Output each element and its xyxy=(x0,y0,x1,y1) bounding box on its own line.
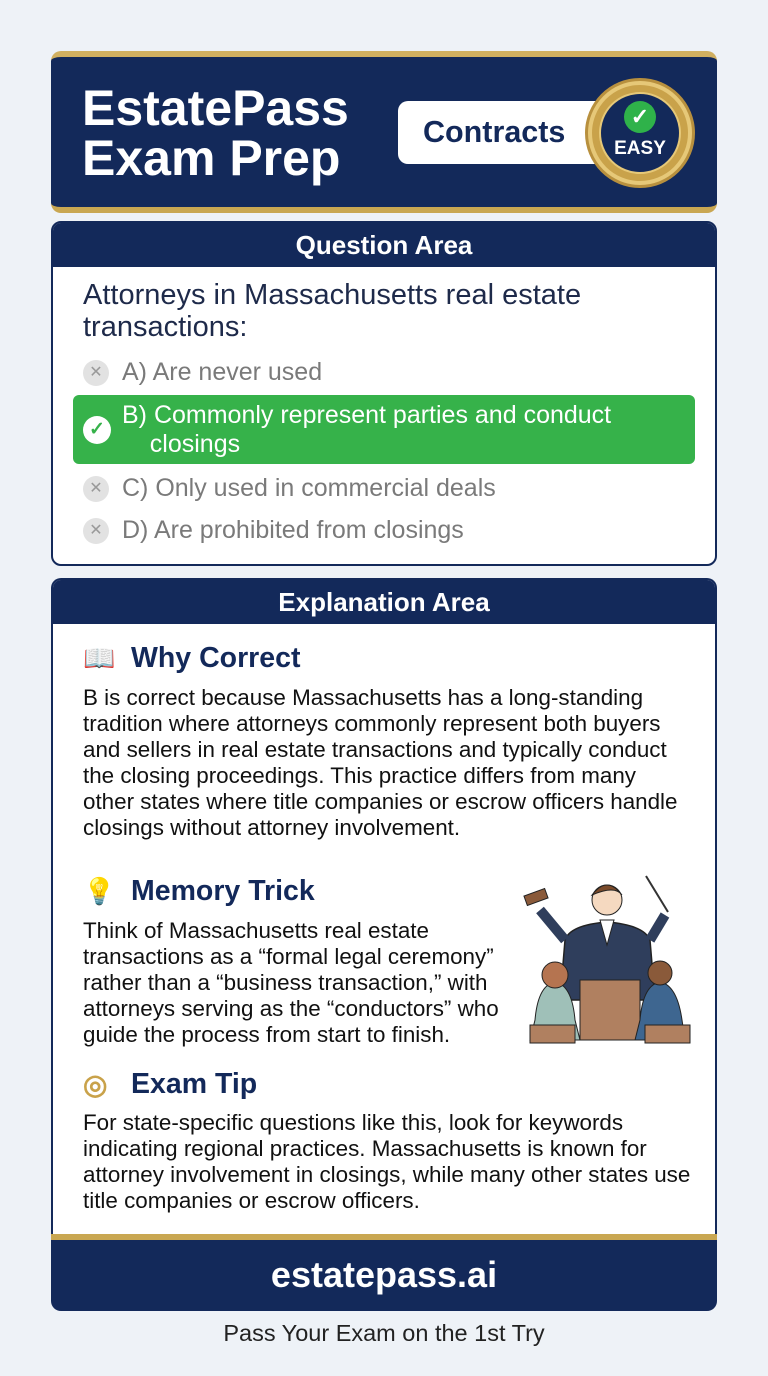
badge: easy: EASY xyxy=(614,138,666,159)
option D: D) Are prohibited from closings xyxy=(122,516,464,544)
badge: easy: ✓ xyxy=(631,104,649,129)
exam tip text xyxy=(83,1110,690,1213)
exam tip heading: Exam Tip xyxy=(131,1068,257,1100)
option B correct: B) Commonly represent parties and conduct xyxy=(122,401,611,429)
exam tip text: indicating regional practices. Massachusetts is known for xyxy=(83,1136,647,1161)
option D: ✕ xyxy=(89,522,103,538)
memory trick text: guide the process from start to finish. xyxy=(83,1022,450,1047)
title: Exam Prep xyxy=(82,130,340,186)
exam tip text: For state-specific questions like this, look for keywords xyxy=(83,1110,623,1135)
heading xyxy=(53,223,715,267)
heading xyxy=(53,580,715,624)
why correct heading: 📖 xyxy=(83,643,115,673)
exam tip text: title companies or escrow officers. xyxy=(83,1188,420,1213)
option C: ✕ xyxy=(89,480,103,496)
why correct text: closings without attorney involvement. xyxy=(83,815,460,840)
why correct text: B is correct because Massachusetts has a long-standing xyxy=(83,685,643,710)
memory trick text: rather than a “business transaction,” with xyxy=(83,970,487,995)
heading: Explanation Area xyxy=(278,587,490,617)
why correct text: other states where title companies or escrow officers handle xyxy=(83,789,677,814)
topic pill xyxy=(398,101,618,164)
why correct heading: Why Correct xyxy=(131,642,300,674)
footer bar: estatepass.ai xyxy=(271,1254,497,1295)
topic pill: Contracts xyxy=(423,115,565,149)
question text: transactions: xyxy=(83,311,247,343)
memory trick text: attorneys serving as the “conductors” who xyxy=(83,996,499,1021)
badge: easy xyxy=(588,81,692,185)
option C: C) Only used in commercial deals xyxy=(122,474,496,502)
why correct text: and sellers in real estate transactions and typically conduct xyxy=(83,737,667,762)
exam tip text: attorney involvement in closings, while many other states use xyxy=(83,1162,690,1187)
memory trick text: transactions as a “formal legal ceremony” xyxy=(83,944,494,969)
why correct text: the closing proceedings. This practice differs from many xyxy=(83,763,636,788)
heading: Question Area xyxy=(296,230,472,260)
exam tip heading: ◎ xyxy=(83,1069,107,1100)
memory trick text: Think of Massachusetts real estate xyxy=(83,918,429,943)
option B correct: closings xyxy=(150,430,240,458)
option B correct xyxy=(73,395,695,464)
question text: Attorneys in Massachusetts real estate xyxy=(83,279,581,311)
why correct text xyxy=(83,685,677,840)
title: EstatePass xyxy=(82,80,349,136)
option B correct: ✓ xyxy=(89,419,105,440)
tagline: Pass Your Exam on the 1st Try xyxy=(223,1320,545,1346)
header banner xyxy=(51,51,717,213)
panel: explanation area xyxy=(51,578,717,1240)
question text xyxy=(83,279,581,343)
footer bar xyxy=(51,1234,717,1311)
memory trick heading: Memory Trick xyxy=(131,875,315,907)
memory trick heading: 💡 xyxy=(83,876,115,906)
title xyxy=(82,80,349,186)
why correct text: tradition where attorneys commonly represent both buyers xyxy=(83,711,660,736)
illustration: attorney conductor xyxy=(523,876,690,1044)
option A: ✕ xyxy=(89,364,103,380)
memory trick text xyxy=(83,918,499,1047)
panel: question area xyxy=(51,221,717,566)
option A: A) Are never used xyxy=(122,358,322,386)
